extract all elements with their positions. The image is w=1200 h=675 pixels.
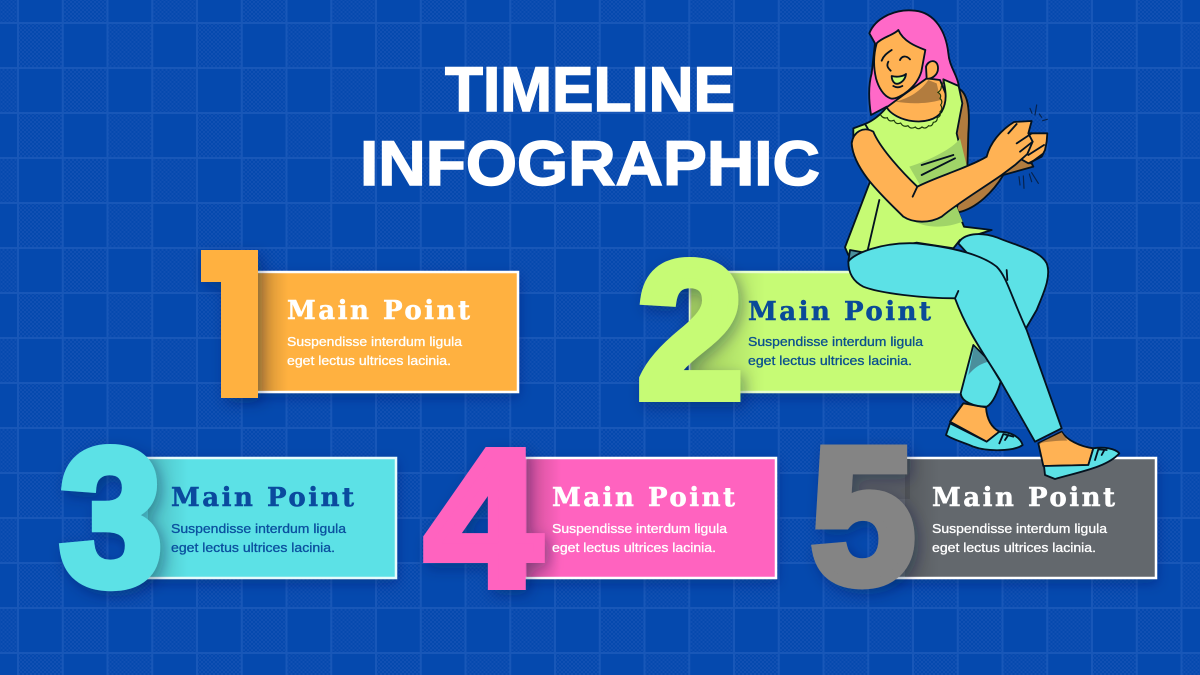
back lower leg bbox=[961, 345, 1001, 407]
legs bbox=[848, 234, 1119, 479]
title bbox=[360, 55, 820, 199]
card 1 text bbox=[287, 296, 470, 368]
number 2: 2 bbox=[638, 222, 743, 438]
front shoe strap bbox=[1095, 449, 1107, 460]
card 5 text: eget lectus ultrices lacinia. bbox=[932, 540, 1096, 555]
number 1: 1 bbox=[205, 208, 322, 443]
card 1 bbox=[240, 272, 518, 392]
blouse folds bbox=[865, 124, 955, 252]
front shoe bbox=[1044, 448, 1119, 479]
card 3 text bbox=[171, 483, 354, 555]
neck shadow bbox=[895, 80, 941, 103]
back hand bbox=[1017, 133, 1047, 163]
card 2 text bbox=[748, 297, 931, 368]
back arm bbox=[940, 88, 1033, 212]
ear bbox=[926, 61, 938, 79]
blouse shade bbox=[909, 138, 967, 185]
hip shade bbox=[848, 250, 868, 262]
clap sparks bbox=[1019, 105, 1047, 188]
card 5 text bbox=[932, 483, 1115, 555]
front arm bbox=[852, 121, 1033, 222]
card 1 text: Suspendisse interdum ligula bbox=[287, 334, 463, 349]
card 2 text: eget lectus ultrices lacinia. bbox=[748, 353, 912, 368]
panel: point 1 bbox=[200, 250, 524, 409]
number 3: 3 bbox=[60, 409, 162, 625]
ankle shadow bbox=[1039, 432, 1067, 443]
card 5 bbox=[850, 458, 1156, 578]
card 1 text: Main Point bbox=[287, 296, 470, 326]
card 4 text: Main Point bbox=[552, 483, 735, 513]
mouth bbox=[892, 74, 906, 84]
card 5 text: Suspendisse interdum ligula bbox=[932, 521, 1108, 536]
number 4: 4 bbox=[426, 411, 540, 627]
card 3 text: eget lectus ultrices lacinia. bbox=[171, 540, 335, 555]
card 1 text: eget lectus ultrices lacinia. bbox=[287, 353, 451, 368]
front leg bbox=[848, 243, 1062, 442]
card 4 text: eget lectus ultrices lacinia. bbox=[552, 540, 716, 555]
title: TIMELINE bbox=[445, 55, 735, 125]
card 2 bbox=[690, 272, 990, 392]
hair bbox=[869, 10, 959, 115]
blouse bbox=[845, 79, 992, 255]
scalloped collar bbox=[881, 80, 943, 129]
face bbox=[874, 30, 925, 99]
back foot bbox=[950, 403, 999, 442]
card 4 text bbox=[552, 483, 735, 555]
back shoe strap bbox=[999, 434, 1013, 443]
eyes nose bbox=[882, 50, 910, 87]
number 5: 5 bbox=[811, 409, 915, 624]
card 3 bbox=[135, 458, 396, 578]
lower leg shade bbox=[968, 347, 988, 375]
card 2 text: Main Point bbox=[748, 297, 931, 327]
knee crease bbox=[955, 270, 1007, 298]
neck and chest bbox=[887, 78, 948, 124]
blouse shade under arm bbox=[915, 207, 963, 227]
back leg bbox=[958, 234, 1048, 330]
card 2 text: Suspendisse interdum ligula bbox=[748, 334, 924, 349]
card 4 bbox=[510, 458, 776, 578]
back shoe bbox=[946, 423, 1023, 450]
title: INFOGRAPHIC bbox=[360, 129, 820, 199]
panel: point 2 bbox=[638, 222, 990, 438]
panel: point 5 bbox=[811, 409, 1156, 624]
panel: point 3 bbox=[60, 409, 396, 625]
front foot bbox=[1038, 432, 1093, 466]
card 3 text: Main Point bbox=[171, 483, 354, 513]
card 3 text: Suspendisse interdum ligula bbox=[171, 521, 347, 536]
card 4 text: Suspendisse interdum ligula bbox=[552, 521, 728, 536]
card 5 text: Main Point bbox=[932, 483, 1115, 513]
upper body bbox=[845, 10, 1047, 255]
arm crease and fingers bbox=[913, 124, 1044, 197]
panel: point 4 bbox=[426, 411, 776, 627]
illustration: clapping woman bbox=[845, 10, 1119, 479]
